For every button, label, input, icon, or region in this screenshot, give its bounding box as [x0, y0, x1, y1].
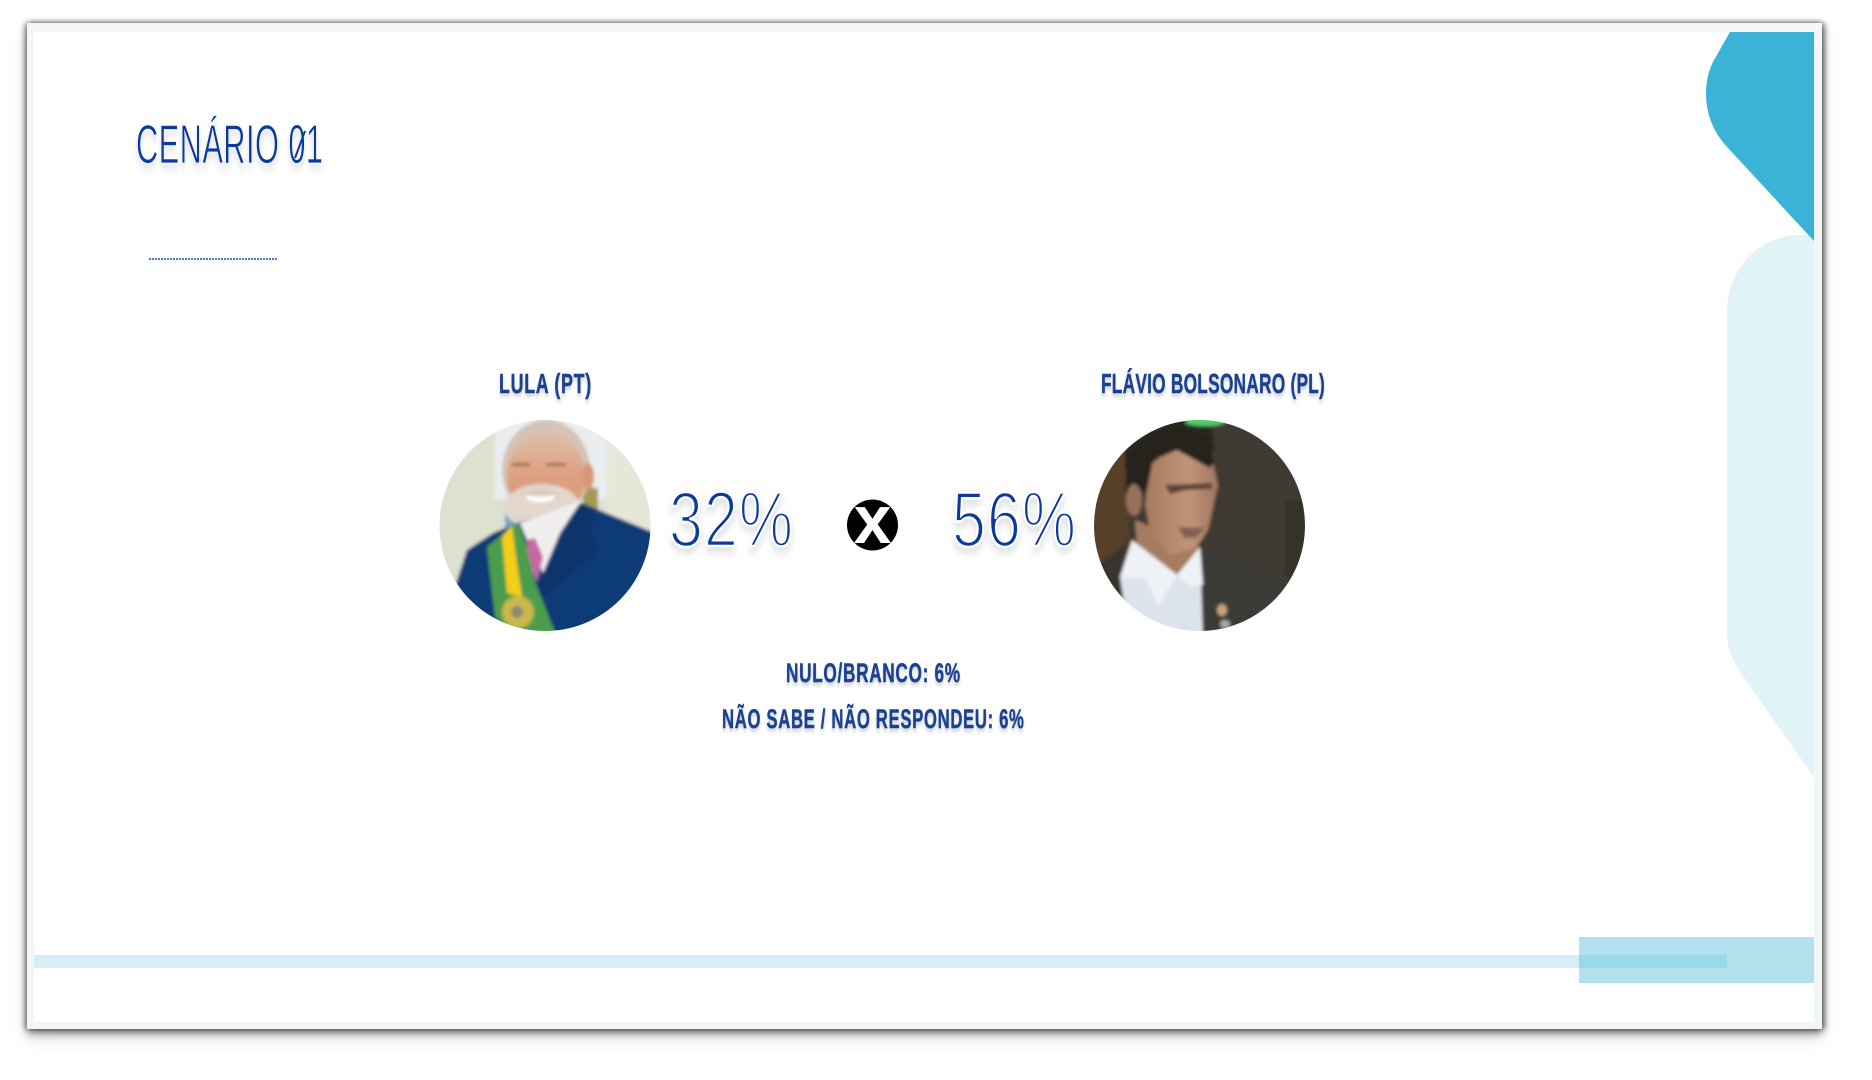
- decoration: bottom bar: [34, 955, 1727, 968]
- title underline: [149, 258, 278, 260]
- decoration: bar overlap: [1579, 955, 1727, 968]
- candidate name: Flávio Bolsonaro: FLÁVIO BOLSONARO (PL): [1101, 367, 1325, 399]
- candidate name: Lula: LULA (PT): [499, 368, 591, 399]
- percentage: Flávio: 56%: [952, 476, 1076, 563]
- decoration: bottom right box: [1579, 937, 1814, 983]
- photo: Flávio Bolsonaro: [1094, 420, 1305, 631]
- decoration: dark blue corner shape: [1706, 32, 1814, 241]
- versus icon: x: [854, 482, 892, 558]
- percentage: Lula: 32%: [669, 476, 793, 563]
- title: CENÁRIO 01: [136, 115, 323, 175]
- decoration: light blue side shape: [1727, 235, 1814, 777]
- photo: Lula: [440, 420, 650, 631]
- other answers: null/blank: NULO/BRANCO: 6%: [786, 657, 960, 688]
- other answers: does not know: NÃO SABE / NÃO RESPONDEU: 6%: [722, 704, 1024, 734]
